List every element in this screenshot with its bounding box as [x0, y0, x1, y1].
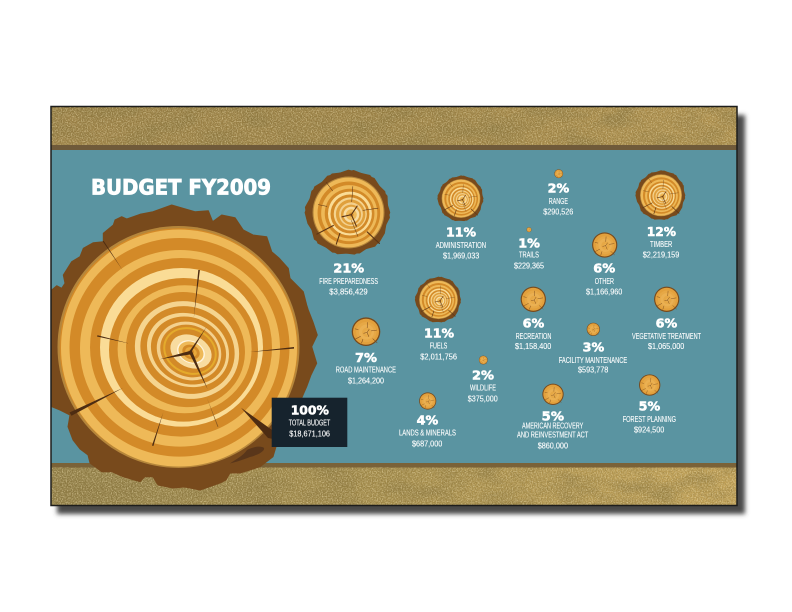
- callout: total budget: 100%: [291, 403, 329, 418]
- item: road maintenance: 7%: [355, 350, 377, 365]
- top wood band: [51, 107, 737, 150]
- item: fuels: FUELS: [430, 341, 447, 351]
- item: fuels: 11%: [424, 325, 454, 340]
- item: american recovery and reinvestment act: [517, 384, 589, 451]
- item: forest planning: [623, 374, 676, 435]
- item: timber: $2,219,159: [643, 250, 679, 260]
- item: fuels: [412, 274, 464, 361]
- item: recreation: RECREATION: [516, 331, 551, 341]
- item: wildlife: WILDLIFE: [470, 383, 496, 393]
- frame border: [51, 106, 737, 506]
- item: facility maintenance: [559, 323, 627, 375]
- big tree log: [52, 205, 317, 490]
- item: fuels: $2,011,756: [420, 351, 457, 361]
- item: american recovery and reinvestment act: AMERICAN RECOVERY: [522, 421, 583, 431]
- item: timber: TIMBER: [650, 239, 672, 249]
- item: american recovery and reinvestment act: $860,000: [538, 441, 568, 451]
- item: forest planning: FOREST PLANNING: [623, 414, 676, 424]
- item: wildlife: [468, 356, 498, 403]
- item: timber: 12%: [647, 224, 676, 239]
- item: fire preparedness: $3,856,429: [329, 286, 368, 296]
- item: facility maintenance: 3%: [583, 340, 605, 355]
- item: vegetative treatment: 6%: [656, 315, 678, 330]
- item: lands and minerals: [399, 392, 456, 448]
- item: other: [586, 232, 622, 297]
- item: wildlife: 2%: [472, 368, 494, 383]
- item: fire preparedness: 21%: [333, 261, 365, 276]
- item: trails: $229,365: [514, 261, 544, 271]
- item: road maintenance: $1,264,200: [348, 375, 384, 385]
- item: lands and minerals: LANDS & MINERALS: [399, 427, 456, 437]
- item: range: 2%: [548, 181, 570, 196]
- item: forest planning: $924,500: [634, 425, 664, 435]
- bark: [52, 205, 317, 490]
- item: administration: $1,969,033: [443, 251, 479, 261]
- item: trails: [514, 227, 544, 271]
- panel: teal background: [51, 107, 737, 505]
- title: BUDGET FY2009: [91, 175, 271, 199]
- item: trails: TRAILS: [519, 250, 539, 260]
- item: range: RANGE: [549, 196, 568, 206]
- item: vegetative treatment: [632, 287, 701, 351]
- item: trails: 1%: [518, 236, 540, 251]
- item: recreation: [515, 287, 551, 351]
- callout: total budget: $18,671,106: [289, 429, 330, 439]
- item: recreation: $1,158,400: [515, 341, 551, 351]
- growth rings: [58, 226, 300, 468]
- item: recreation: 6%: [523, 315, 545, 330]
- item: range: $290,526: [543, 207, 573, 217]
- item: american recovery and reinvestment act: AND REINVESTMENT ACT: [517, 430, 589, 440]
- cracks: [70, 241, 294, 464]
- item: vegetative treatment: VEGETATIVE TREATMENT: [632, 331, 701, 341]
- drop shadow: [57, 115, 745, 514]
- item: administration: 11%: [446, 225, 476, 240]
- item: lands and minerals: $687,000: [412, 438, 442, 448]
- item: timber: [633, 167, 688, 260]
- item: road maintenance: ROAD MAINTENANCE: [336, 365, 396, 375]
- item: vegetative treatment: $1,065,000: [648, 341, 684, 351]
- item: other: 6%: [593, 260, 616, 275]
- item: facility maintenance: $593,778: [578, 365, 608, 375]
- callout: total budget: TOTAL BUDGET: [289, 418, 331, 428]
- bottom wood band: [51, 463, 737, 505]
- item: range: [543, 169, 573, 217]
- item: facility maintenance: FACILITY MAINTENANCE: [559, 355, 627, 365]
- callout: total budget: [272, 398, 347, 447]
- item: other: OTHER: [595, 276, 614, 286]
- item: fire preparedness: FIRE PREPAREDNESS: [319, 276, 378, 286]
- item: wildlife: $375,000: [468, 393, 498, 403]
- item: other: $1,166,960: [586, 287, 622, 297]
- item: road maintenance: [336, 317, 396, 385]
- panel: infographic frame: [51, 107, 737, 505]
- item: lands and minerals: 4%: [417, 412, 439, 427]
- item: fire preparedness: [300, 165, 395, 296]
- item: administration: [435, 173, 486, 261]
- item: american recovery and reinvestment act: 5%: [542, 408, 564, 423]
- item: forest planning: 5%: [639, 398, 661, 413]
- item: administration: ADMINISTRATION: [436, 240, 486, 250]
